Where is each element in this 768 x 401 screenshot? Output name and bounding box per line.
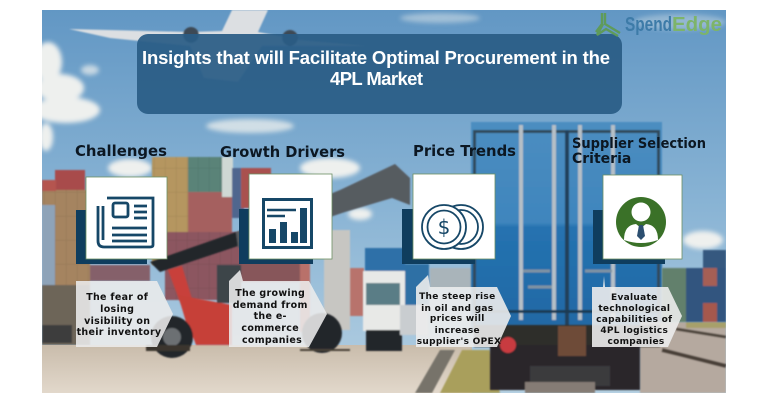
logo: SpendEdge xyxy=(596,13,722,36)
callout xyxy=(592,276,682,347)
column: Challenges xyxy=(75,142,173,347)
clouds xyxy=(32,13,726,249)
callout: companies xyxy=(242,335,302,346)
column: Supplier Selection Criteria xyxy=(572,136,711,347)
callout: visibility on xyxy=(84,316,150,327)
title text: Insights that will Facilitate Optimal Procurement in the xyxy=(142,47,610,68)
callout: demand from xyxy=(233,300,308,311)
icon: coins xyxy=(422,205,483,249)
icon: report chart xyxy=(264,200,312,248)
callout: The steep rise xyxy=(419,292,495,302)
reach stacker xyxy=(146,164,410,358)
ground xyxy=(42,345,472,393)
airplane xyxy=(70,10,331,60)
heading: Criteria xyxy=(572,151,631,167)
callout: The fear of xyxy=(86,292,149,303)
blue rail container xyxy=(471,122,662,332)
icon card xyxy=(603,175,682,259)
callout: their inventory xyxy=(77,327,162,338)
callout: companies xyxy=(607,337,665,347)
icon: newspaper xyxy=(98,198,153,247)
icon card xyxy=(86,177,167,259)
icon: supplier person xyxy=(616,197,666,247)
callout: losing xyxy=(100,304,134,315)
column: Price Trends xyxy=(402,142,516,347)
callout: Evaluate xyxy=(611,293,658,303)
callout: capabilities of xyxy=(596,315,672,325)
callout: commerce xyxy=(241,323,299,334)
callout: in oil and gas xyxy=(421,304,493,314)
callout: the e- xyxy=(254,311,287,322)
heading: Supplier Selection xyxy=(572,136,706,152)
icon: coins: $ xyxy=(438,215,450,239)
logo: SpendEdge: Edge xyxy=(672,14,722,36)
logo: SpendEdge: Spend xyxy=(625,14,672,36)
icon card backing xyxy=(76,210,147,264)
container stacks right xyxy=(662,250,726,322)
callout: supplier's OPEX xyxy=(417,337,501,347)
gravel and rails xyxy=(640,322,726,393)
callout xyxy=(229,270,327,347)
title panel: 4PL Market xyxy=(330,68,423,89)
trackside grass xyxy=(440,350,500,393)
callout xyxy=(76,281,173,347)
heading: Growth Drivers xyxy=(220,143,345,161)
icon card backing xyxy=(239,209,313,264)
callout: prices will xyxy=(430,314,485,324)
rail undercarriage xyxy=(474,325,660,393)
callout: 4PL logistics xyxy=(600,326,668,336)
icon card xyxy=(249,174,332,259)
heading: Challenges xyxy=(75,142,167,160)
callout xyxy=(416,275,511,347)
white truck xyxy=(363,248,472,351)
heading: Price Trends xyxy=(413,142,516,160)
callout: technological xyxy=(598,304,670,314)
icon card backing xyxy=(593,210,665,264)
callout: The growing xyxy=(235,288,305,299)
callout: increase xyxy=(435,326,480,336)
title panel xyxy=(137,34,622,114)
icon card xyxy=(413,174,495,259)
icon card backing xyxy=(402,209,475,264)
container stacks left xyxy=(42,157,364,345)
column: Growth Drivers xyxy=(220,143,345,347)
